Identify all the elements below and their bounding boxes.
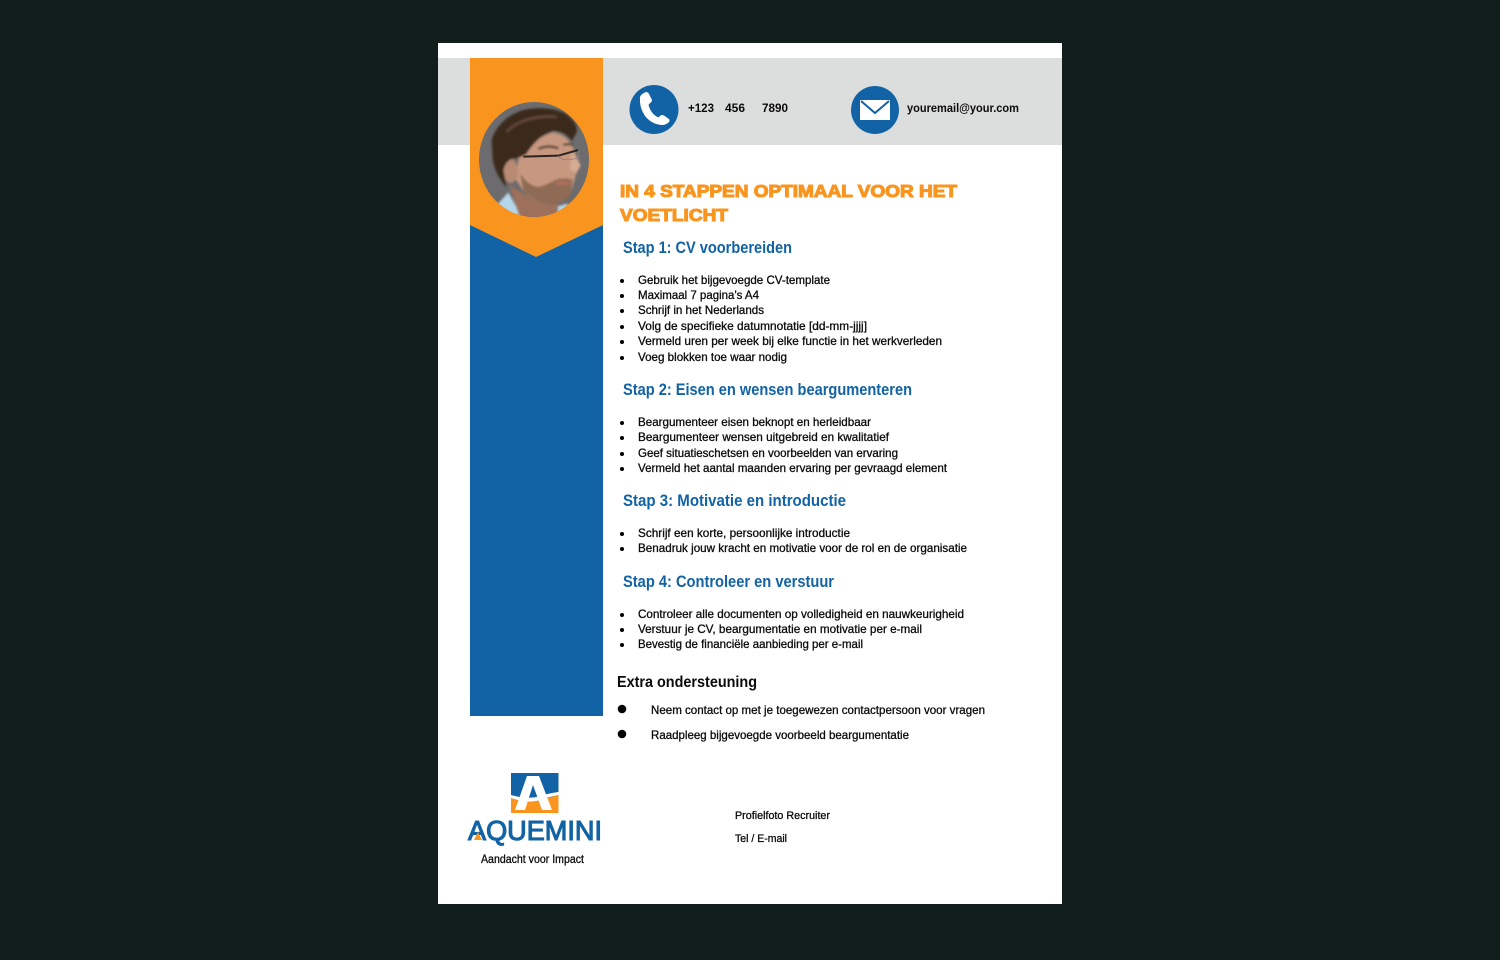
sidebar ribbon <box>470 58 603 716</box>
logo: Aquemini: AQUEMINI <box>468 815 602 846</box>
step 1 list: Schrijf in het Nederlands <box>638 303 764 317</box>
step 1 list: Volg de specifieke datumnotatie [dd-mm-jjjj] <box>638 319 867 333</box>
step 2 list: Vermeld het aantal maanden ervaring per gevraagd element <box>638 461 948 475</box>
recruiter contact: Tel / E-mail <box>735 833 787 845</box>
recruiter contact: Profielfoto Recruiter <box>735 810 830 822</box>
step 1 list: Voeg blokken toe waar nodig <box>638 350 787 364</box>
step 2 heading: Stap 2: Eisen en wensen beargumenteren <box>623 381 912 399</box>
contact band <box>438 58 1062 145</box>
title <box>620 181 957 225</box>
icon: envelope <box>851 86 899 134</box>
step 1 list: Gebruik het bijgevoegde CV-template <box>638 273 830 287</box>
logo: Aquemini <box>468 773 602 846</box>
extra support heading: Extra ondersteuning <box>617 674 757 691</box>
step 4 heading: Stap 4: Controleer en verstuur <box>623 573 835 591</box>
recruiter contact <box>735 810 830 845</box>
step 1 list <box>620 273 942 364</box>
step 4 list <box>620 607 964 651</box>
phone number: 456 <box>725 101 745 115</box>
step 2 list <box>620 415 948 475</box>
page sheet <box>438 43 1062 904</box>
step 1 list: Maximaal 7 pagina's A4 <box>638 288 759 302</box>
phone number: 7890 <box>762 101 788 115</box>
step 4 list: Controleer alle documenten op volledigheid en nauwkeurigheid <box>638 607 964 621</box>
step 3 list: Schrijf een korte, persoonlijke introductie <box>638 526 850 540</box>
email address: youremail@your.com <box>907 101 1019 115</box>
step 3 list: Benadruk jouw kracht en motivatie voor de rol en de organisatie <box>638 541 967 555</box>
title: IN 4 STAPPEN OPTIMAAL VOOR HET <box>620 181 957 201</box>
extra support list <box>618 703 985 742</box>
extra support list: Raadpleeg bijgevoegde voorbeeld beargumentatie <box>651 728 909 742</box>
phone number: +123 <box>688 101 714 115</box>
extra support list: Neem contact op met je toegewezen contactpersoon voor vragen <box>651 703 985 717</box>
step 2 list: Geef situatieschetsen en voorbeelden van ervaring <box>638 446 898 460</box>
step 3 heading: Stap 3: Motivatie en introductie <box>623 492 846 510</box>
step 1 heading: Stap 1: CV voorbereiden <box>623 239 792 257</box>
phone number <box>688 101 788 115</box>
step 4 list: Bevestig de financiële aanbieding per e-mail <box>638 637 863 651</box>
profile photo <box>479 102 589 218</box>
icon: phone <box>630 85 678 134</box>
step 2 list: Beargumenteer eisen beknopt en herleidbaar <box>638 415 871 429</box>
step 1 list: Vermeld uren per week bij elke functie in het werkverleden <box>638 334 942 348</box>
title: VOETLICHT <box>620 205 728 225</box>
step 2 list: Beargumenteer wensen uitgebreid en kwalitatief <box>638 430 890 444</box>
step 3 list <box>620 526 967 555</box>
logo tagline: Aandacht voor Impact <box>481 852 585 866</box>
step 4 list: Verstuur je CV, beargumentatie en motivatie per e-mail <box>638 622 922 636</box>
